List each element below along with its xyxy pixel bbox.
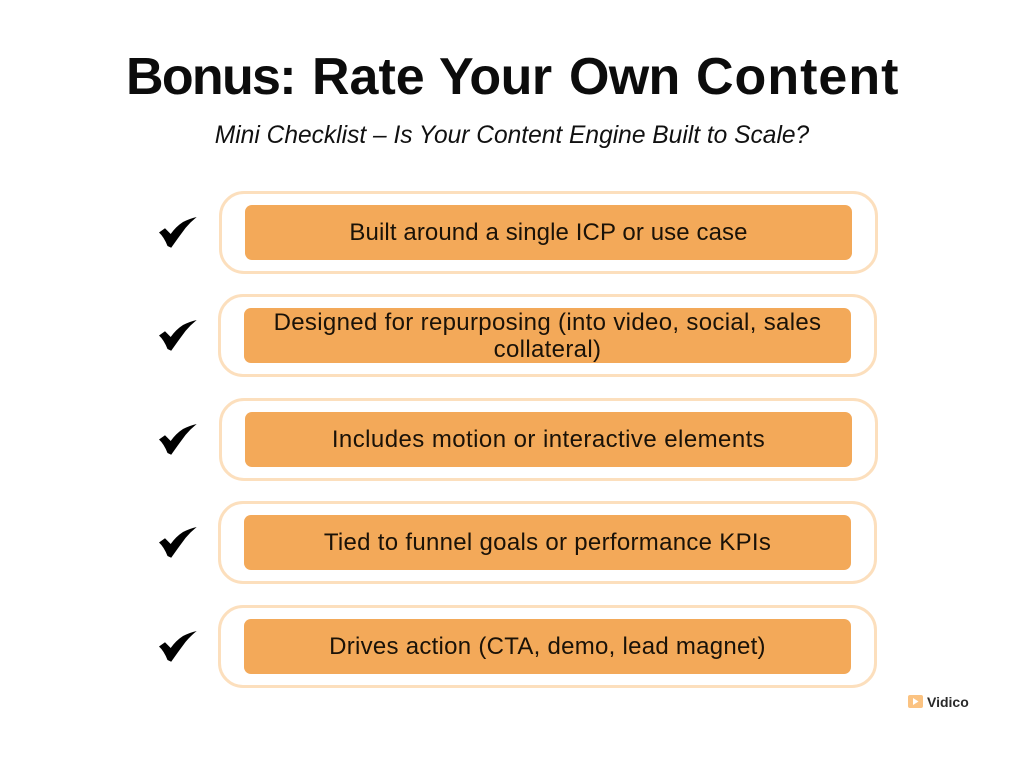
- item 5 bar: Drives action (CTA, demo, lead magnet): [329, 633, 766, 660]
- panel: item 4 outline: [218, 501, 877, 584]
- icon: check mark 1: [159, 217, 197, 248]
- panel: item 5 outline: [218, 605, 877, 688]
- icon: check mark 2: [159, 320, 197, 351]
- title: [126, 48, 899, 106]
- title: Own: [569, 48, 680, 106]
- item 3 bar: Includes motion or interactive elements: [332, 426, 765, 453]
- item 2 bar: Designed for repurposing (into video, social, sales collateral): [274, 309, 821, 363]
- item 3 bar: [245, 412, 852, 467]
- panel: item 1 outline: [219, 191, 878, 274]
- title: Rate: [312, 48, 425, 106]
- icon: check mark 4: [159, 527, 197, 558]
- panel: item 2 outline: [218, 294, 877, 377]
- item 4 bar: Tied to funnel goals or performance KPIs: [324, 529, 771, 556]
- title: Your: [439, 48, 552, 106]
- icon: check mark 5: [159, 631, 197, 662]
- item 1 bar: [245, 205, 852, 260]
- subtitle: Mini Checklist – Is Your Content Engine Built to Scale?: [215, 122, 809, 149]
- icon: play badge: [908, 695, 923, 708]
- logo: Vidico: [908, 694, 969, 710]
- item 1 bar: Built around a single ICP or use case: [349, 219, 748, 246]
- panel: item 3 outline: [219, 398, 878, 481]
- item 5 bar: [244, 619, 851, 674]
- icon: check mark 3: [159, 424, 197, 455]
- title: Bonus:: [126, 48, 295, 106]
- item 4 bar: [244, 515, 851, 570]
- logo wordmark: Vidico: [927, 694, 969, 710]
- title: Content: [696, 48, 899, 106]
